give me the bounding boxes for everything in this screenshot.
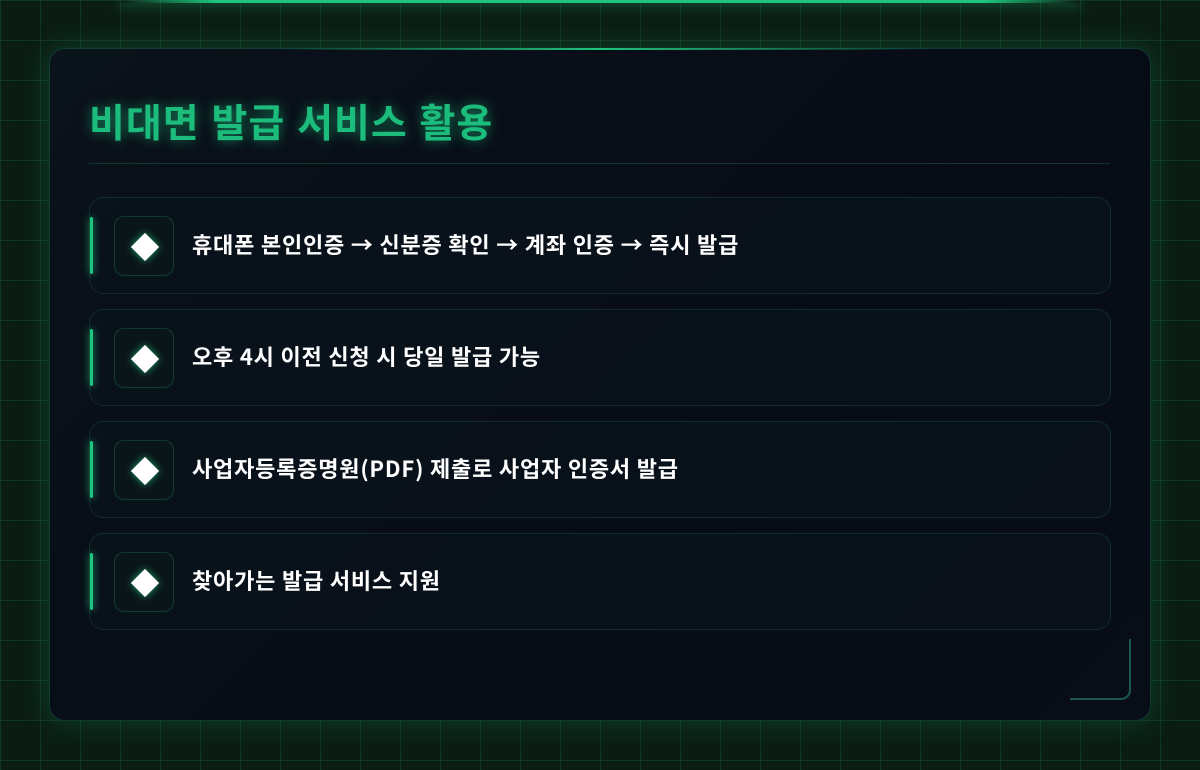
item 3: [89, 421, 1111, 518]
icon: diamond: [114, 216, 174, 276]
icon: diamond: [114, 552, 174, 612]
text 1: 휴대폰 본인인증 → 신분증 확인 → 계좌 인증 → 즉시 발급: [192, 228, 739, 260]
item 4: [89, 533, 1111, 630]
item 2: [89, 309, 1111, 406]
title: 비대면 발급 서비스 활용: [89, 103, 493, 146]
corner bracket: [1070, 639, 1131, 700]
text 4: 찾아가는 발급 서비스 지원: [192, 564, 441, 596]
text 2: 오후 4시 이전 신청 시 당일 발급 가능: [192, 340, 541, 372]
icon: diamond: [114, 328, 174, 388]
item 1: [89, 197, 1111, 294]
icon: diamond: [114, 440, 174, 500]
text 3: 사업자등록증명원(PDF) 제출로 사업자 인증서 발급: [192, 452, 679, 484]
